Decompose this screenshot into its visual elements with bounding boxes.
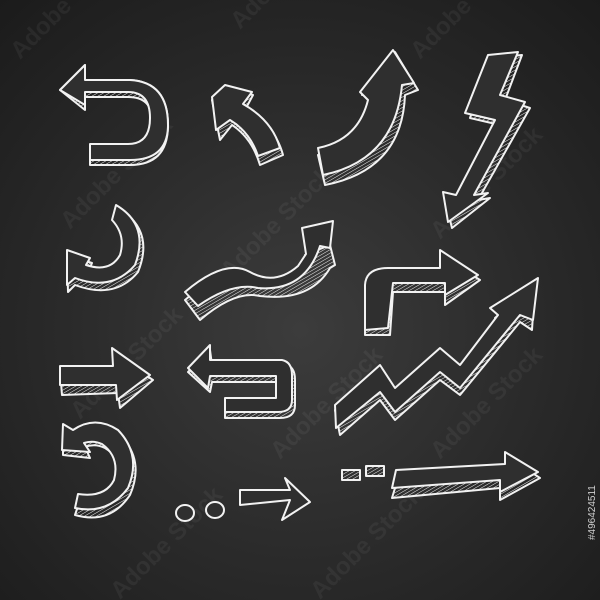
arrow: circle bottom-left	[62, 422, 136, 518]
arrow: zigzag up-right	[335, 278, 538, 435]
arrow: long right	[392, 452, 540, 500]
arrow: curved up-right	[318, 50, 418, 185]
watermark: Adobe Stock	[425, 341, 548, 464]
watermark: Adobe Stock	[65, 301, 188, 424]
id text: #496424511	[587, 485, 598, 540]
watermark: Adobe Stock	[425, 121, 548, 244]
arrow: wavy right	[185, 221, 335, 320]
arrow: u-turn top-left	[60, 65, 168, 165]
watermark: Adobe Stock	[265, 341, 388, 464]
dots	[176, 505, 194, 521]
arrow: right	[60, 348, 153, 408]
arrow: circular	[67, 205, 143, 292]
watermark: Adobe Stock	[55, 111, 178, 234]
dashes	[342, 470, 360, 480]
arrow: u-turn middle	[188, 345, 295, 418]
watermark: Adobe Stock	[215, 161, 338, 284]
arrow: lightning	[443, 52, 530, 228]
arrow: short right	[240, 478, 310, 520]
arrow: curved up-left	[212, 85, 283, 165]
arrow: bent right	[365, 250, 480, 335]
